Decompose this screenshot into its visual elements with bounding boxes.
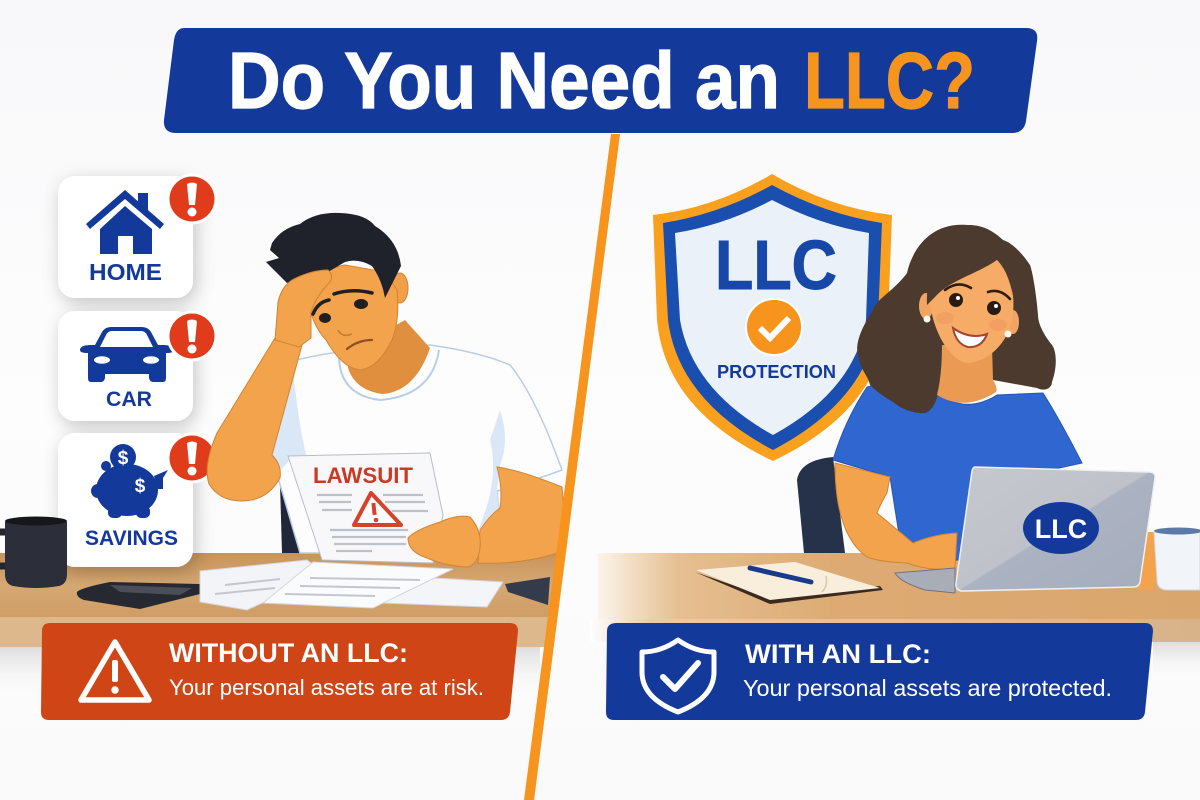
notebook and pen bbox=[695, 562, 883, 604]
left ear bbox=[919, 293, 933, 319]
callout: with an LLC: WITH AN LLC: bbox=[745, 639, 931, 669]
panel: assets at risk bbox=[58, 174, 218, 567]
icon: piggy bank: $ bbox=[118, 448, 129, 469]
hair bbox=[266, 213, 401, 298]
card: savings bbox=[58, 432, 218, 567]
smiling woman bbox=[797, 225, 1159, 590]
face details bbox=[313, 291, 372, 349]
lawsuit paper bbox=[288, 453, 443, 563]
neck bbox=[348, 320, 430, 394]
left arm bbox=[835, 463, 957, 569]
shield: LLC protection bbox=[653, 174, 892, 461]
face details bbox=[924, 284, 1012, 347]
calculator bbox=[77, 582, 208, 609]
icon: dark mug bbox=[0, 516, 67, 588]
alert badge bbox=[166, 432, 218, 484]
front hair bbox=[927, 225, 1015, 305]
alert badge bbox=[166, 310, 218, 362]
lawsuit paper: LAWSUIT bbox=[313, 463, 414, 488]
callout: with an LLC bbox=[606, 623, 1153, 720]
warning sign bbox=[354, 493, 401, 525]
shield: LLC protection: PROTECTION bbox=[717, 362, 836, 382]
shirt shading bbox=[250, 362, 505, 530]
card: home bbox=[58, 174, 218, 298]
white mug bbox=[1154, 528, 1200, 590]
callout: without an LLC bbox=[41, 623, 518, 720]
icon: warning triangle bbox=[81, 642, 149, 700]
title banner: LLC? bbox=[804, 36, 975, 125]
card: car: CAR bbox=[106, 387, 152, 411]
laptop bbox=[895, 467, 1155, 593]
hand on forehead bbox=[275, 270, 332, 347]
long hair bbox=[857, 225, 1056, 413]
shield: LLC protection: LLC bbox=[715, 226, 837, 304]
left desk bbox=[0, 553, 556, 697]
neck bbox=[937, 345, 997, 403]
card: savings: SAVINGS bbox=[85, 526, 178, 550]
callout: with an LLC: Your personal assets are protected. bbox=[743, 675, 1112, 701]
chair bbox=[280, 473, 316, 553]
chair bbox=[797, 457, 845, 553]
icon: piggy bank bbox=[91, 444, 168, 518]
callout: without an LLC: Your personal assets are at risk. bbox=[169, 675, 484, 700]
LLC logo: LLC bbox=[1035, 514, 1087, 544]
icon: orange check bbox=[746, 299, 802, 355]
title banner: Do You Need an bbox=[228, 36, 780, 125]
head bbox=[308, 265, 398, 370]
LLC logo bbox=[1023, 502, 1099, 554]
collar bbox=[339, 350, 439, 400]
right hand bbox=[1139, 532, 1159, 590]
icon: piggy bank: $ bbox=[135, 476, 146, 497]
hand holding paper bbox=[408, 516, 480, 567]
blue shirt bbox=[833, 383, 1082, 560]
shirt bbox=[250, 345, 562, 553]
ear bbox=[392, 273, 408, 303]
icon: car bbox=[80, 327, 174, 382]
alert badge bbox=[166, 174, 218, 224]
right desk bbox=[590, 553, 1200, 682]
title banner bbox=[164, 28, 1037, 133]
card: car bbox=[58, 310, 218, 421]
orange divider bbox=[524, 134, 620, 800]
desk papers bbox=[200, 560, 550, 610]
face bbox=[930, 254, 1013, 363]
icon: shield check bbox=[642, 640, 714, 712]
right ear bbox=[1007, 310, 1019, 334]
right arm bbox=[478, 467, 563, 563]
worried man bbox=[207, 213, 563, 563]
left arm bbox=[207, 338, 302, 501]
icon: house bbox=[86, 190, 164, 254]
callout: without an LLC: WITHOUT AN LLC: bbox=[169, 638, 408, 668]
card: home: HOME bbox=[89, 259, 162, 285]
